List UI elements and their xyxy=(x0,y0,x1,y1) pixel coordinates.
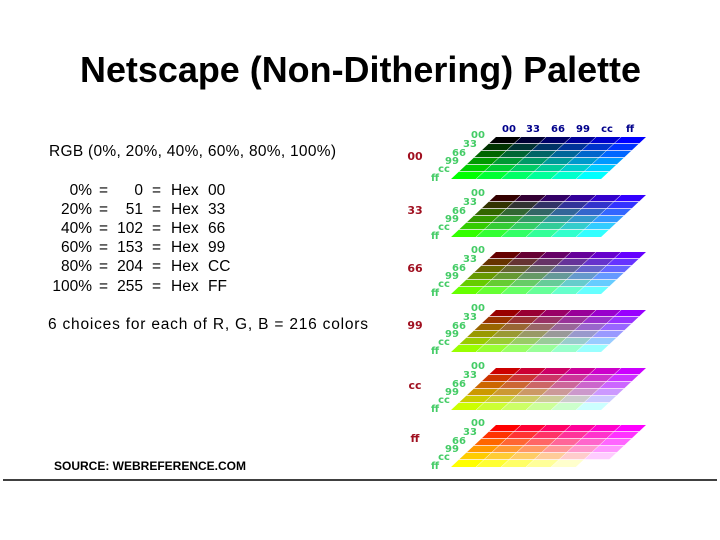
palette plane: red ff: ff xyxy=(411,432,420,445)
text: 216 colors summary: 6 choices for each of R, G, B = 216 colors xyxy=(48,316,368,333)
table: percent to decimal to hex conversion: 00 xyxy=(208,182,226,199)
palette plane: red 33: 66 xyxy=(452,206,466,217)
palette plane: red 33: 33 xyxy=(463,197,477,208)
palette plane: red 99: 66 xyxy=(452,321,466,332)
table: percent to decimal to hex conversion: = xyxy=(152,278,161,295)
table: percent to decimal to hex conversion: 0% xyxy=(70,182,92,199)
table: percent to decimal to hex conversion: 51 xyxy=(126,201,143,218)
palette plane: red 33: 33 xyxy=(407,204,423,217)
table: percent to decimal to hex conversion: 102 xyxy=(117,220,143,237)
palette plane: red 99: cc xyxy=(438,337,450,348)
palette plane: red 66: cc xyxy=(438,279,450,290)
palette plane: red 99: 99 xyxy=(407,319,423,332)
palette plane: red 00: ff xyxy=(431,173,440,184)
palette plane: red cc xyxy=(408,361,646,415)
palette plane: red ff: 00 xyxy=(471,418,485,429)
table: percent to decimal to hex conversion: 40% xyxy=(61,220,92,237)
blue channel axis labels: 00 xyxy=(502,124,516,135)
palette plane: red ff: 99 xyxy=(445,444,459,455)
palette plane: red cc: 00 xyxy=(471,361,485,372)
table: percent to decimal to hex conversion: = xyxy=(99,201,108,218)
palette plane: red cc: cc xyxy=(438,395,450,406)
heading: RGB percentages: RGB (0%, 20%, 40%, 60%, 80%, 100%) xyxy=(49,143,336,160)
palette plane: red 33: 00 xyxy=(471,188,485,199)
palette plane: red 66: ff xyxy=(431,288,440,299)
table: percent to decimal to hex conversion: 255 xyxy=(117,278,143,295)
palette plane: red 00: 66 xyxy=(452,148,466,159)
table: percent to decimal to hex conversion: 0 xyxy=(134,182,143,199)
table: percent to decimal to hex conversion: 33 xyxy=(208,201,225,218)
table: percent to decimal to hex conversion: Hex xyxy=(171,182,199,199)
palette plane: red 00: 00 xyxy=(471,130,485,141)
palette plane: red ff: cc xyxy=(438,452,450,463)
table: percent to decimal to hex conversion: = xyxy=(152,201,161,218)
blue channel axis labels: 99 xyxy=(576,124,590,135)
palette plane: red 66 xyxy=(407,245,646,299)
table: percent to decimal to hex conversion: = xyxy=(99,258,108,275)
table: percent to decimal to hex conversion: CC xyxy=(208,258,230,275)
table: percent to decimal to hex conversion: Hex xyxy=(171,239,199,256)
palette plane: red 00: cc xyxy=(438,164,450,175)
table: percent to decimal to hex conversion: 20% xyxy=(61,201,92,218)
table: percent to decimal to hex conversion: 66 xyxy=(208,220,225,237)
palette plane: red 66: 66 xyxy=(407,262,423,275)
table: percent to decimal to hex conversion: 153 xyxy=(117,239,143,256)
table: percent to decimal to hex conversion: = xyxy=(99,239,108,256)
palette plane: red 99: 99 xyxy=(445,329,459,340)
palette plane: red 66: 33 xyxy=(463,254,477,265)
table: percent to decimal to hex conversion: Hex xyxy=(171,258,199,275)
table: percent to decimal to hex conversion: Hex xyxy=(171,201,199,218)
palette plane: red 00: 33 xyxy=(463,139,477,150)
palette plane: red ff: ff xyxy=(431,461,440,472)
palette plane: red 99 xyxy=(407,303,646,357)
table: percent to decimal to hex conversion: 204 xyxy=(117,258,143,275)
table: percent to decimal to hex conversion: = xyxy=(152,182,161,199)
palette plane: red 33 xyxy=(407,188,646,242)
table: percent to decimal to hex conversion: = xyxy=(152,239,161,256)
palette plane: red cc: cc xyxy=(408,379,422,392)
palette plane: red 33: cc xyxy=(438,222,450,233)
palette plane: red cc: 99 xyxy=(445,387,459,398)
blue channel axis labels: cc xyxy=(601,124,613,135)
table: percent to decimal to hex conversion: = xyxy=(152,220,161,237)
table: percent to decimal to hex conversion: 99 xyxy=(208,239,225,256)
blue channel axis labels: 66 xyxy=(551,124,565,135)
blue channel axis labels: ff xyxy=(626,124,635,135)
source note: SOURCE: WEBREFERENCE.COM xyxy=(54,459,246,473)
table: percent to decimal to hex conversion: 80% xyxy=(61,258,92,275)
palette plane: red cc: ff xyxy=(431,404,440,415)
table: percent to decimal to hex conversion: = xyxy=(152,258,161,275)
palette plane: red 33: 99 xyxy=(445,214,459,225)
palette plane: red 99: 33 xyxy=(463,312,477,323)
palette plane: red 00: 00 xyxy=(407,150,423,163)
palette plane: red cc: 33 xyxy=(463,370,477,381)
table: percent to decimal to hex conversion: FF xyxy=(208,278,227,295)
table: percent to decimal to hex conversion: = xyxy=(99,220,108,237)
palette plane: red 99: ff xyxy=(431,346,440,357)
palette plane: red 99: 00 xyxy=(471,303,485,314)
table: percent to decimal to hex conversion: = xyxy=(99,278,108,295)
title: Netscape (Non-Dithering) Palette xyxy=(80,49,641,90)
palette plane: red 33: ff xyxy=(431,231,440,242)
table: percent to decimal to hex conversion: Hex xyxy=(171,220,199,237)
baseline rule xyxy=(3,479,717,481)
table: percent to decimal to hex conversion: 100% xyxy=(52,278,92,295)
palette plane: red ff xyxy=(411,418,646,472)
blue channel axis labels xyxy=(502,124,635,135)
palette plane: red 00: 99 xyxy=(445,156,459,167)
palette plane: red 66: 99 xyxy=(445,271,459,282)
palette plane: red cc: 66 xyxy=(452,379,466,390)
palette plane: red ff: 66 xyxy=(452,436,466,447)
palette plane: red 66: 66 xyxy=(452,263,466,274)
table: percent to decimal to hex conversion xyxy=(52,182,230,295)
table: percent to decimal to hex conversion: Hex xyxy=(171,278,199,295)
palette plane: red 00 xyxy=(407,130,646,184)
table: percent to decimal to hex conversion: = xyxy=(99,182,108,199)
palette plane: red 66: 00 xyxy=(471,245,485,256)
blue channel axis labels: 33 xyxy=(526,124,540,135)
table: percent to decimal to hex conversion: 60% xyxy=(61,239,92,256)
palette plane: red ff: 33 xyxy=(463,427,477,438)
